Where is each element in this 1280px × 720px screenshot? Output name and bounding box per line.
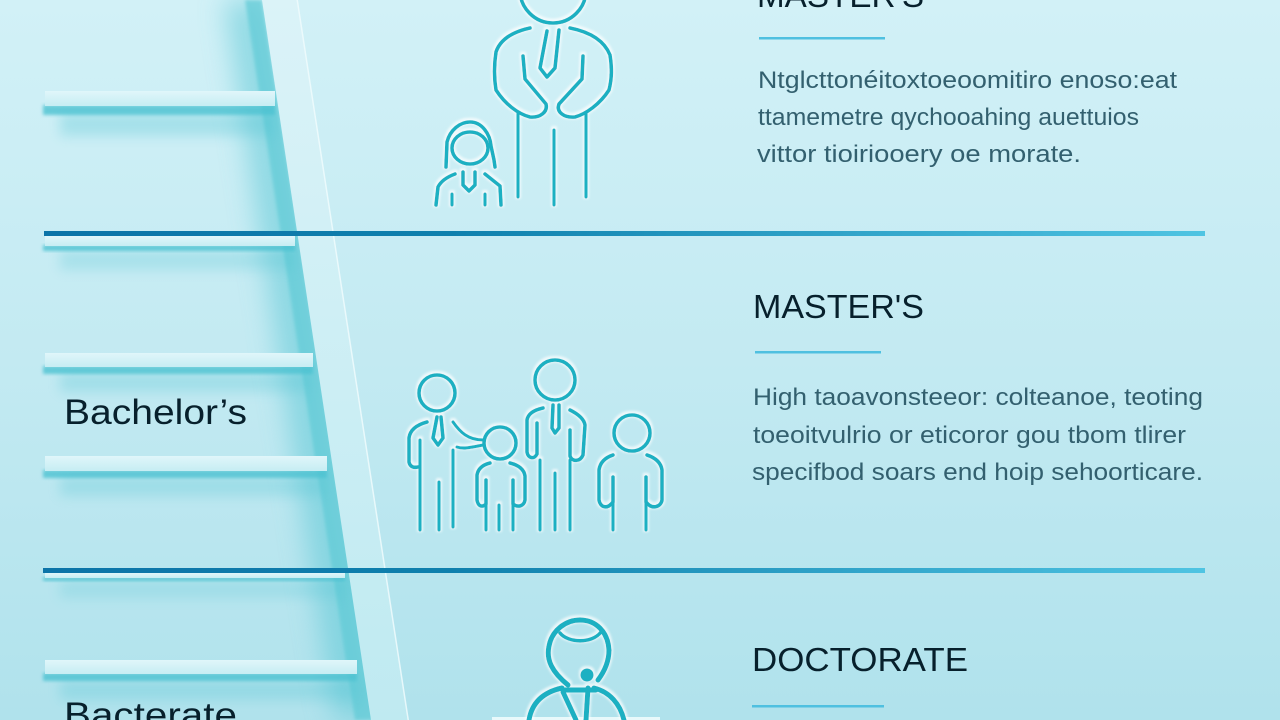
rung shadows (43, 105, 357, 700)
heading rule (752, 705, 884, 708)
icon: group of four people, middle (409, 360, 662, 530)
heading rule (759, 37, 885, 40)
description lines: High taoavonsteeor: colteanoe, teoting (753, 384, 1203, 411)
doctor figure (529, 620, 624, 720)
icon: adult and child, top (436, 0, 611, 205)
rail highlight (296, 0, 409, 720)
description lines (757, 67, 1177, 168)
description lines (752, 384, 1203, 486)
heading rule (755, 351, 881, 354)
description lines: specifbod soars end hoip sehoorticare. (752, 459, 1203, 486)
description lines: Ntglcttonéitoxtoeoomitiro enoso:eat (758, 67, 1177, 94)
heading: doctorate: DOCTORATE (752, 641, 968, 678)
description lines: ttamemetre qychooahing auettuios (758, 104, 1139, 131)
white base band (492, 717, 660, 720)
ladder rail (262, 0, 408, 720)
rail shadow (225, 0, 375, 720)
icon: doctor, bottom (492, 620, 660, 720)
description lines: vittor tioiriooery oe morate. (757, 141, 1081, 168)
heading: master's: MASTER'S (753, 288, 924, 325)
text block: master's (752, 288, 1203, 486)
text block: master's top, cropped (757, 0, 1177, 168)
ladder rungs (45, 91, 357, 674)
divider line lower (43, 568, 1205, 573)
label: Bachelor's: Bachelor’s (64, 393, 247, 432)
description lines: toeoitvulrio or eticoror gou tbom tlirer (753, 422, 1186, 449)
divider line upper (44, 231, 1205, 236)
ladder illustration (43, 0, 409, 720)
